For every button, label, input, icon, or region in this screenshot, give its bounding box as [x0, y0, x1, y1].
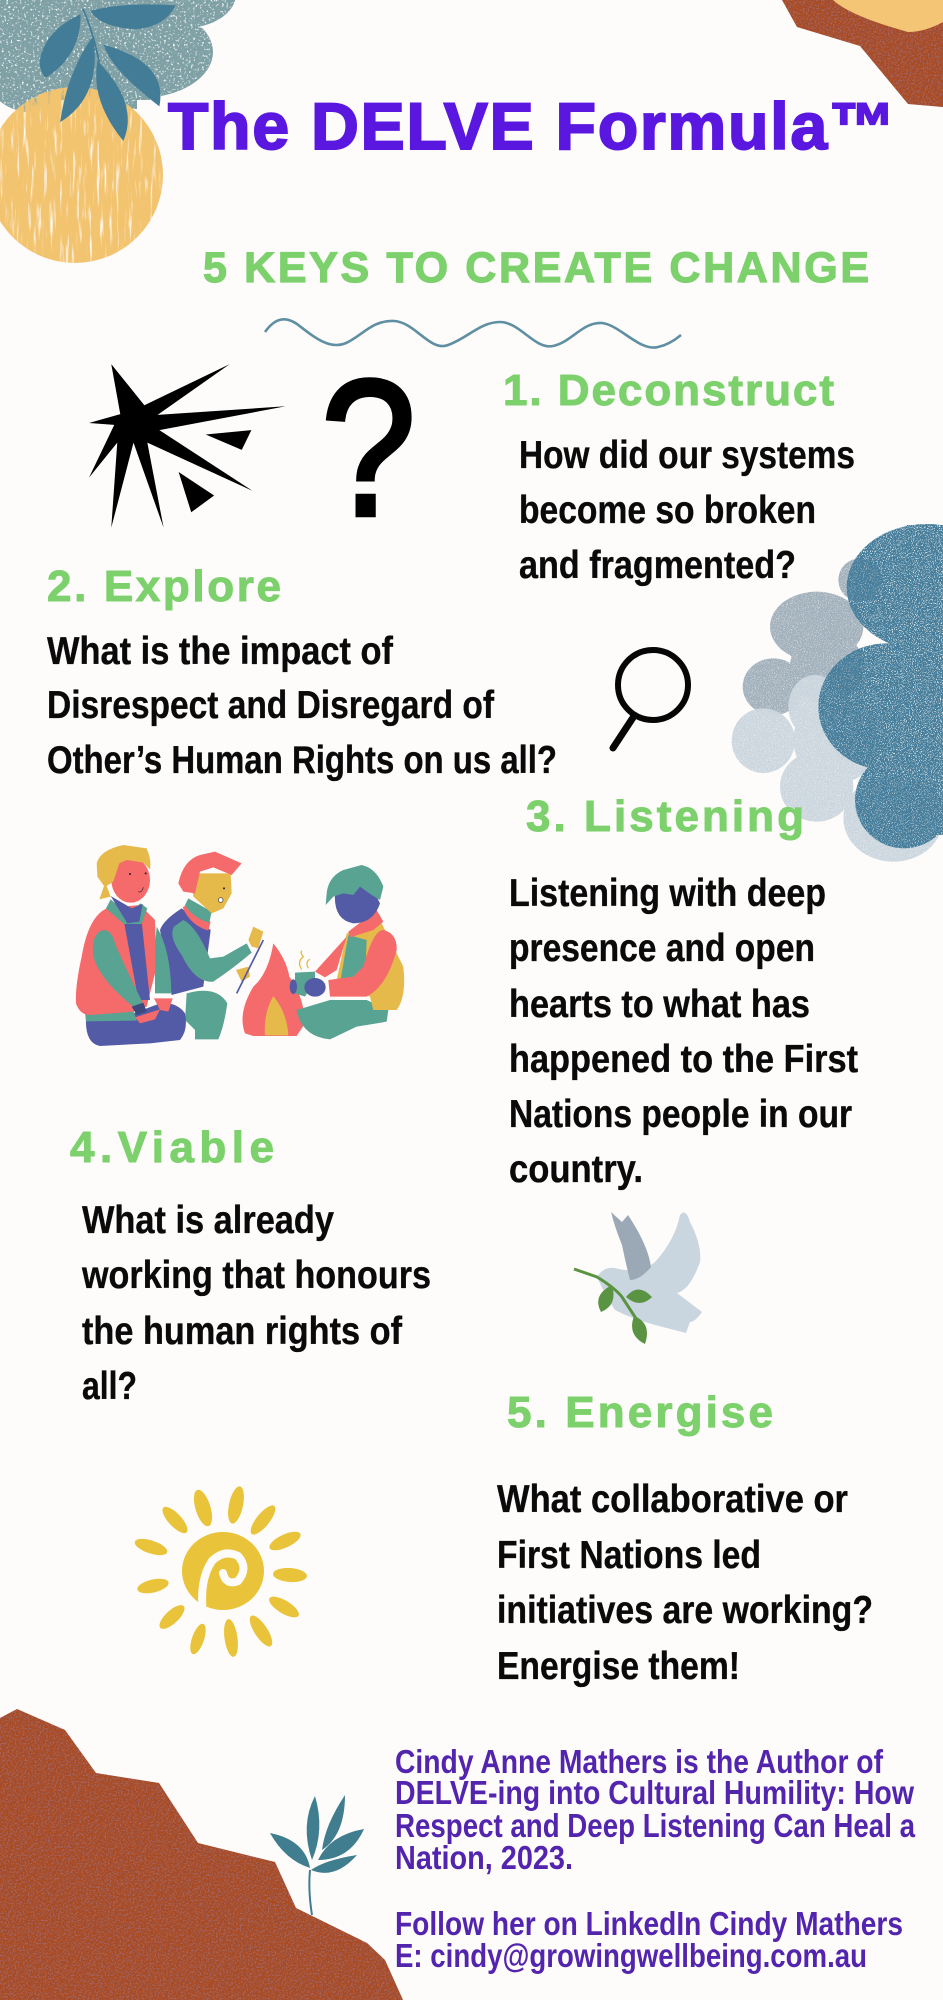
section 1: Deconstruct — [503, 366, 855, 587]
body — [519, 434, 855, 587]
body: Listening with deep — [509, 872, 826, 915]
section 5: Energise — [497, 1388, 873, 1688]
olive branch — [574, 1269, 652, 1344]
section 4: Viable — [70, 1123, 431, 1408]
decoration: right clouds — [732, 524, 943, 862]
dove body and wing — [597, 1213, 702, 1333]
decoration: top-right rock and sun — [782, 0, 943, 107]
teal cloud — [0, 0, 236, 112]
body — [81, 1199, 431, 1408]
body: and fragmented? — [519, 544, 796, 587]
rust rock — [782, 0, 943, 107]
leaf branch — [40, 4, 176, 141]
body: country. — [509, 1148, 643, 1191]
wavy divider — [265, 319, 681, 348]
body: What collaborative or — [497, 1478, 848, 1521]
title: The DELVE Formula™ — [168, 89, 895, 163]
heading: 5. Energise — [507, 1388, 773, 1437]
body: become so broken — [519, 489, 816, 532]
author credit block — [395, 1743, 916, 1974]
body: Nations people in our — [509, 1093, 852, 1136]
body: working that honours — [81, 1254, 431, 1297]
mid grey cloud — [743, 558, 882, 715]
body: happened to the First — [509, 1038, 858, 1081]
icon: black starburst — [89, 364, 286, 528]
icon: yellow spiral sun — [133, 1485, 307, 1658]
author credit block: Nation, 2023. — [395, 1839, 573, 1876]
illustration: dove with olive branch — [574, 1212, 702, 1344]
body: First Nations led — [497, 1534, 761, 1577]
dark blue cloud — [818, 524, 943, 848]
person 2: middle — [160, 852, 263, 1039]
orange sun — [0, 87, 163, 263]
body: Energise them! — [497, 1645, 740, 1688]
decoration: top-left cloud, sun and leaves — [0, 0, 236, 263]
heading: 3. Listening — [526, 792, 804, 841]
body — [497, 1478, 873, 1688]
body: presence and open — [509, 927, 815, 970]
body — [509, 872, 858, 1191]
icon: question mark: ? — [321, 340, 416, 556]
person 3: right — [290, 865, 404, 1039]
body: initiatives are working? — [497, 1589, 873, 1632]
person 1: left — [76, 845, 186, 1046]
section 2: Explore — [47, 562, 557, 782]
body: the human rights of — [82, 1310, 403, 1353]
body: Other’s Human Rights on us all? — [47, 739, 557, 782]
campfire — [243, 943, 305, 1036]
body: all? — [82, 1365, 137, 1408]
plant — [270, 1795, 364, 1915]
body — [47, 630, 557, 782]
dove dark wing — [611, 1212, 651, 1280]
light grey cloud — [732, 675, 943, 862]
illustration: three people around a campfire — [76, 845, 404, 1046]
icon: magnifying glass — [613, 650, 688, 748]
heading: 1. Deconstruct — [503, 366, 834, 415]
body: How did our systems — [519, 434, 855, 477]
heading: 2. Explore — [47, 562, 281, 611]
section 3: Listening — [509, 792, 858, 1191]
body: What is the impact of — [47, 630, 394, 673]
author credit block: E: cindy@growingwellbeing.com.au — [395, 1937, 867, 1974]
subtitle: 5 KEYS TO CREATE CHANGE — [203, 244, 869, 292]
decoration: bottom-left rust mountain — [0, 1709, 403, 2000]
body: hearts to what has — [509, 983, 810, 1026]
body: Disrespect and Disregard of — [47, 684, 495, 727]
body: What is already — [82, 1199, 334, 1242]
orange sun segment — [833, 0, 943, 32]
heading: 4.Viable — [70, 1123, 274, 1172]
